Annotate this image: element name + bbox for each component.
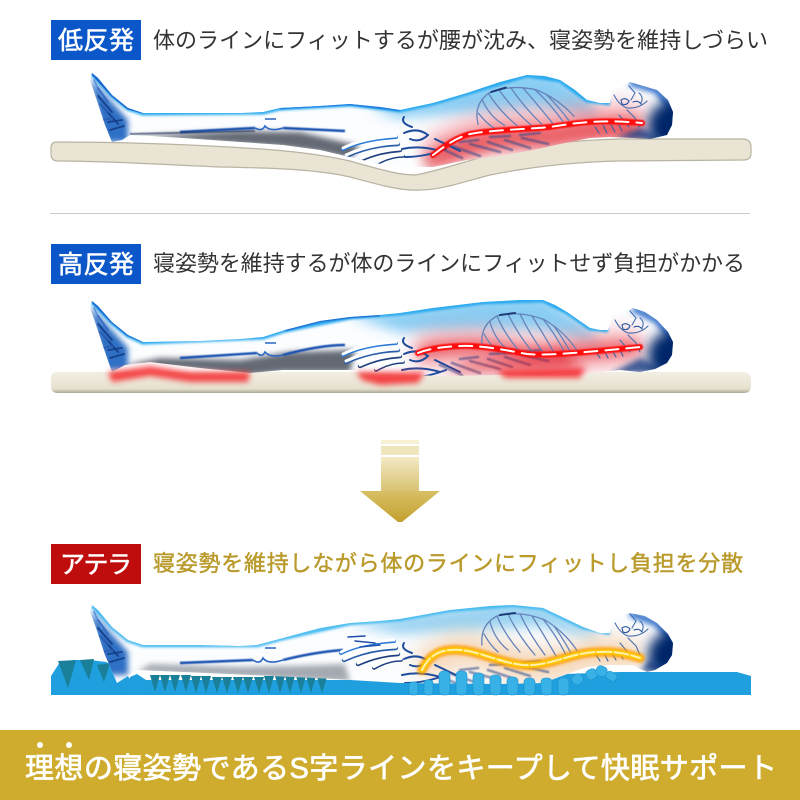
mattress blocks pressing the body — [409, 665, 618, 695]
section: low rebound — [51, 20, 768, 190]
figure: body sinking — [90, 73, 673, 167]
emphasis dots — [37, 742, 72, 748]
divider — [50, 213, 750, 214]
mattress: sagging — [51, 139, 751, 190]
pressure glow — [108, 366, 585, 385]
section: ATERA — [51, 544, 751, 695]
section: high rebound — [51, 244, 751, 393]
caption: high rebound: 寝姿勢を維持するが体のラインにフィットせず負担がかかる — [153, 251, 745, 276]
spine line — [418, 346, 640, 355]
spine line: S curve — [422, 650, 640, 670]
figure: body supported — [90, 605, 673, 684]
footer banner — [0, 730, 800, 800]
badge: 低反発 — [51, 20, 141, 60]
badge: 高反発: 高反発 — [58, 251, 134, 279]
mattress: blue profile foam — [51, 659, 751, 695]
figure: body on flat mattress — [90, 300, 673, 390]
caption: ATERA: 寝姿勢を維持しながら体のラインにフィットし負担を分散 — [153, 551, 743, 576]
caption: low rebound: 体のラインにフィットするが腰が沈み、寝姿勢を維持しづらい — [153, 28, 768, 53]
badge: アテラ: アテラ — [60, 551, 132, 579]
badge: 高反発 — [51, 244, 141, 284]
mattress: flat — [51, 372, 751, 393]
arrow: down — [360, 440, 440, 522]
footer text: 理想の寝姿勢であるS字ラインをキープして快眠サポート — [25, 752, 777, 785]
spine line — [433, 121, 642, 155]
badge: アテラ — [51, 544, 141, 584]
badge: 低反発: 低反発 — [58, 27, 134, 55]
